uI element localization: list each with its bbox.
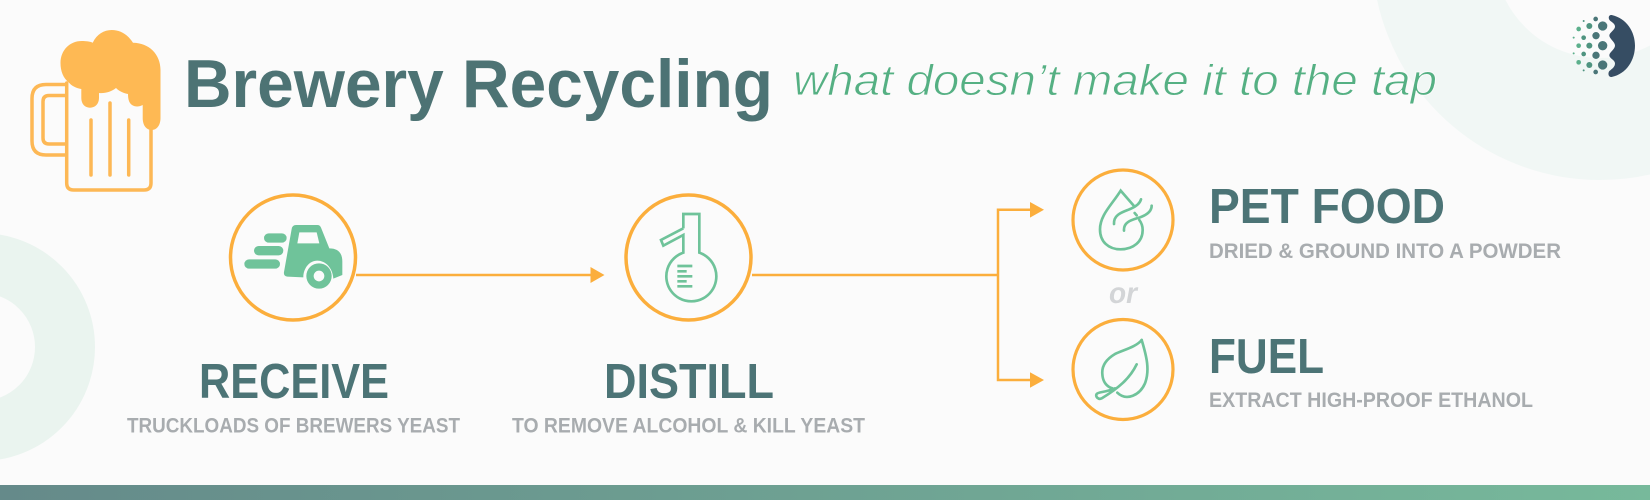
- panel: receive: [127, 195, 460, 438]
- heading: distill: DISTILL: [604, 355, 774, 409]
- text: pet food description: DRIED & GROUND INTO A POWDER: [1209, 240, 1561, 263]
- icon: leaf in circle: [1073, 320, 1173, 420]
- panel: fuel: [1073, 320, 1533, 420]
- text: or: or: [1109, 277, 1139, 310]
- icon: beer mug: [32, 30, 160, 190]
- arrow: receive to distill: [356, 267, 604, 283]
- icon: logo: [1573, 15, 1635, 77]
- heading: pet food: PET FOOD: [1209, 180, 1445, 234]
- heading: receive: RECEIVE: [199, 355, 389, 409]
- panel: pet food: [1073, 170, 1561, 270]
- arrow: distill branching to pet food and fuel: [752, 202, 1044, 388]
- icon: distilling flask in circle: [626, 195, 751, 320]
- text: receive description: TRUCKLOADS OF BREWERS YEAST: [127, 414, 460, 438]
- subtitle: what doesn’t make it to the tap: [793, 56, 1437, 105]
- icon: delivery truck in circle: [230, 195, 356, 320]
- background ring: left: [0, 263, 65, 431]
- heading: fuel: FUEL: [1209, 330, 1324, 384]
- text: fuel description: EXTRACT HIGH-PROOF ETHANOL: [1209, 389, 1533, 412]
- text: distill description: TO REMOVE ALCOHOL & KILL YEAST: [512, 414, 865, 438]
- bottom gradient bar: [0, 485, 1650, 500]
- panel: distill: [512, 195, 865, 438]
- title: Brewery Recycling: [184, 46, 773, 122]
- icon: drop with steam in circle: [1073, 170, 1173, 270]
- background ring: top right: [1433, 0, 1650, 119]
